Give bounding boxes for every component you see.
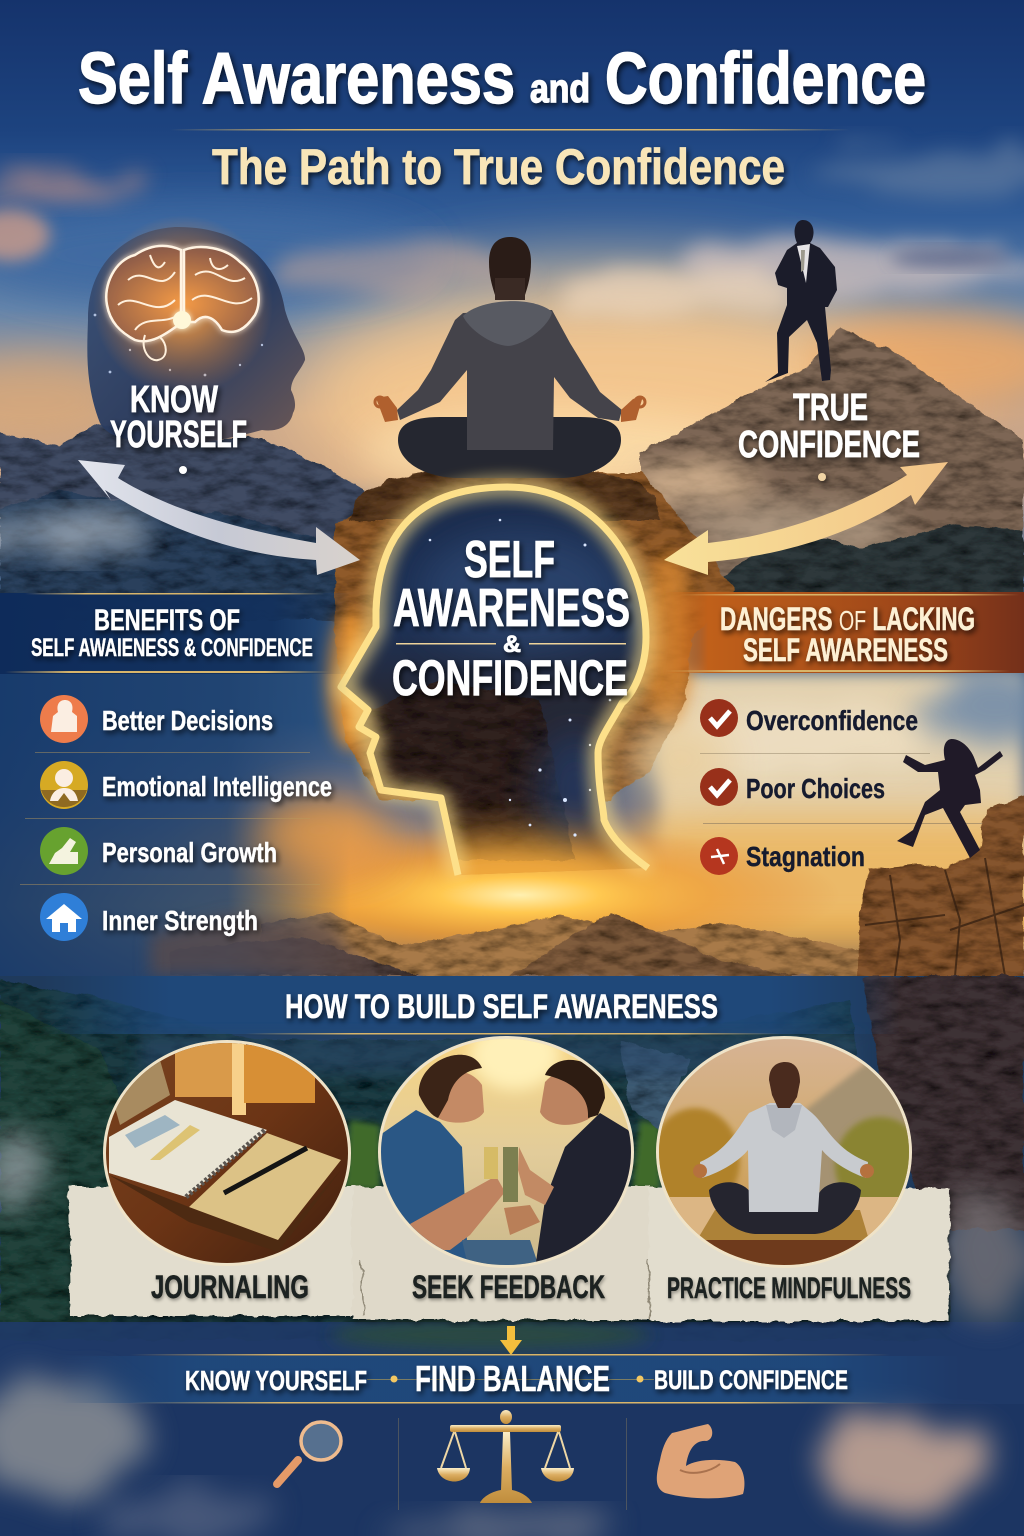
true confidence label: CONFIDENCE — [738, 424, 920, 466]
balance strip — [60, 1354, 960, 1404]
center title text: AWARENESS — [393, 578, 630, 638]
center title text: SELF — [464, 531, 555, 589]
benefit: better decisions — [40, 695, 273, 743]
dangers heading — [720, 601, 975, 668]
photo: journaling — [103, 1040, 351, 1266]
arrow: from center to true confidence — [664, 462, 948, 575]
parchment banner — [68, 1186, 950, 1321]
label: seek feedback: SEEK FEEDBACK — [412, 1269, 605, 1305]
danger: stagnation — [700, 837, 865, 875]
danger: poor choices — [700, 768, 885, 806]
balance strip labels: KNOW YOURSELF — [185, 1365, 367, 1396]
panel: benefits — [0, 593, 380, 976]
benefit: better decisions: Better Decisions — [102, 705, 273, 736]
balance strip labels: BUILD CONFIDENCE — [654, 1365, 848, 1395]
photo: practice mindfulness — [656, 1036, 912, 1268]
label: journaling: JOURNALING — [151, 1269, 309, 1305]
center title text: CONFIDENCE — [392, 650, 628, 706]
benefits heading — [31, 604, 313, 662]
danger: overconfidence — [700, 699, 918, 737]
central head — [335, 485, 655, 920]
true confidence label — [738, 387, 920, 481]
danger: poor choices: Poor Choices — [746, 773, 885, 804]
benefit: inner strength: Inner Strength — [102, 905, 258, 936]
photo: seek feedback — [378, 1036, 634, 1268]
benefit: personal growth: Personal Growth — [102, 837, 277, 868]
how to build heading: HOW TO BUILD SELF AWARENESS — [285, 988, 718, 1026]
icon: magnifying glass — [277, 1422, 341, 1484]
center title text: & — [503, 631, 521, 658]
arrow: from center to know yourself — [78, 460, 360, 575]
icon: flexed arm — [657, 1424, 744, 1498]
jumping silhouette — [897, 739, 1003, 858]
arrow: down to balance — [500, 1326, 522, 1355]
title — [78, 39, 926, 119]
benefit: personal growth — [40, 827, 277, 875]
subtitle: The Path to True Confidence — [212, 139, 785, 195]
title: Self Awareness — [78, 39, 515, 119]
title: Confidence — [605, 39, 926, 119]
dangers heading: DANGERS OF LACKING — [720, 601, 975, 637]
icon: balance scale — [437, 1410, 574, 1503]
benefits heading: BENEFITS OF — [94, 604, 240, 637]
meditating man — [350, 237, 660, 520]
panel: dangers — [665, 592, 1024, 875]
businessman on peak — [765, 220, 837, 382]
title: and — [530, 67, 590, 111]
balance strip labels — [185, 1358, 848, 1399]
danger: stagnation: Stagnation — [746, 841, 865, 872]
know yourself label: YOURSELF — [110, 414, 247, 456]
true confidence label: TRUE — [793, 387, 868, 429]
cliff — [857, 796, 1024, 985]
benefit: emotional intelligence: Emotional Intelligence — [102, 771, 332, 802]
section: how to build background — [0, 976, 1024, 1536]
center title text — [392, 531, 630, 706]
benefit: emotional intelligence — [40, 761, 332, 809]
benefit: inner strength — [40, 893, 258, 941]
balance strip labels: FIND BALANCE — [415, 1358, 610, 1399]
know yourself head silhouette — [87, 215, 305, 474]
icon: glowing brain — [93, 215, 273, 395]
mountain peak and rock behind head — [326, 472, 735, 800]
danger: overconfidence: Overconfidence — [746, 705, 918, 736]
know yourself label: KNOW — [130, 379, 218, 421]
benefits heading: SELF AWAIENESS & CONFIDENCE — [31, 634, 313, 662]
know yourself label — [110, 379, 247, 456]
